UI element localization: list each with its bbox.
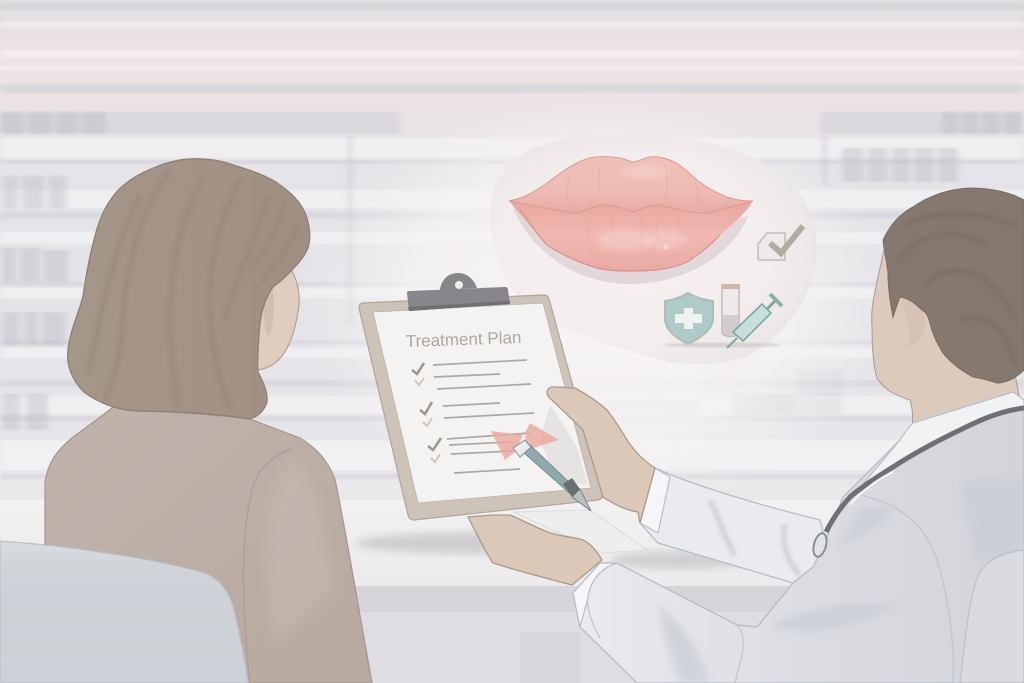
paper under hand [513, 510, 647, 553]
chair: doctor [960, 550, 1024, 683]
hand: lower [468, 515, 602, 585]
paper shadow [540, 405, 588, 485]
lips [509, 157, 753, 284]
lip shadow [513, 208, 748, 284]
clip [407, 273, 510, 311]
hair [68, 159, 310, 419]
checklist [412, 360, 534, 473]
stethoscope [811, 408, 1024, 558]
icon: syringe [727, 294, 782, 348]
neck and face [872, 245, 1020, 428]
bubble [490, 135, 817, 364]
white coat [573, 392, 1024, 683]
red highlight arrows [491, 423, 559, 460]
title text: Treatment Plan [405, 328, 522, 351]
glow behind lips [300, 85, 900, 515]
ear [901, 297, 925, 347]
chair: patient [0, 541, 248, 683]
thought bubble with lips [490, 135, 817, 364]
patient [45, 159, 372, 683]
paper [373, 303, 591, 503]
upper sleeve [640, 468, 830, 583]
pen [513, 440, 591, 511]
board [359, 295, 602, 520]
doctor [573, 188, 1024, 683]
collar [858, 392, 1024, 490]
icon: shield [665, 293, 713, 344]
hand: upper [547, 387, 655, 523]
icon shadow [664, 342, 780, 348]
cuff: lower sleeve [573, 563, 617, 627]
icon: checkbox [758, 226, 803, 260]
face [240, 268, 299, 370]
desk [0, 500, 1024, 683]
sweater [45, 407, 372, 683]
icon: test tube [721, 284, 740, 336]
clipboard [359, 273, 602, 520]
hair [883, 188, 1024, 383]
